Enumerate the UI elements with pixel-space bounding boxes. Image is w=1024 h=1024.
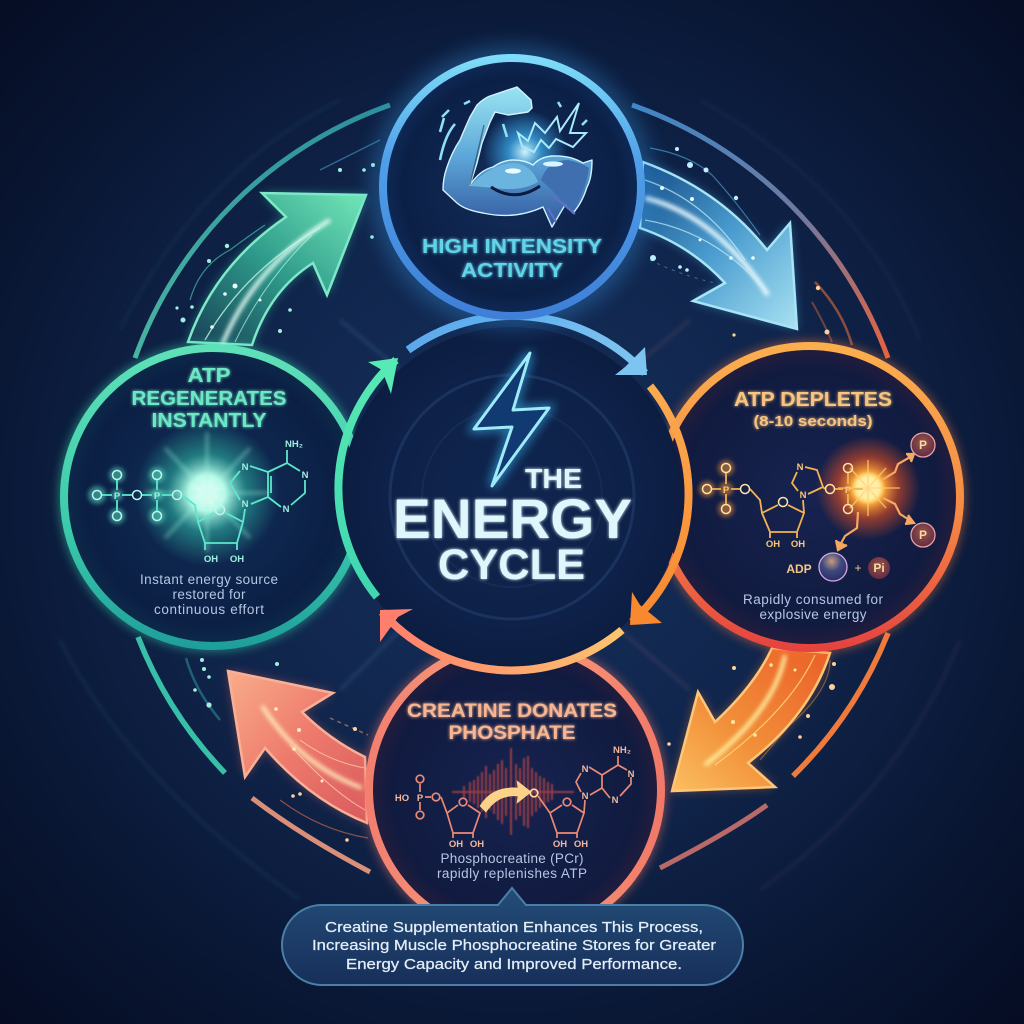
ADP plus Pi equation xyxy=(786,553,890,581)
molecule: creatine phosphate: OH xyxy=(470,839,484,850)
molecule: adenosine xyxy=(530,745,635,850)
heading: creatine donates phosphate: PHOSPHATE xyxy=(448,722,576,744)
heading: ATP regenerates instantly: ATP xyxy=(188,365,230,387)
explosion burst xyxy=(816,436,920,540)
molecule: creatine phosphate: OH xyxy=(449,839,463,850)
heading: high intensity activity: HIGH INTENSITY xyxy=(422,236,603,258)
arrow: coral to left circle xyxy=(228,671,367,823)
sparkles xyxy=(175,140,852,842)
heading: high intensity activity xyxy=(422,236,603,282)
molecule: creatine phosphate: HO xyxy=(395,793,409,804)
molecule: depleting ATP: P xyxy=(845,485,852,496)
caption: instant energy source: restored for xyxy=(172,587,246,602)
heading: ATP depletes: ATP DEPLETES xyxy=(734,389,892,411)
waveform xyxy=(452,748,574,835)
molecule: ATP: P xyxy=(154,491,161,502)
caption: rapidly consumed: Rapidly consumed for xyxy=(743,592,884,607)
icon: lightning bolt xyxy=(474,353,549,486)
title: the energy cycle xyxy=(393,463,632,589)
molecule: adenosine: N xyxy=(628,769,635,780)
molecule: ATP: OH xyxy=(204,554,218,565)
heading: ATP depletes xyxy=(734,389,892,430)
energy burst xyxy=(135,421,279,565)
molecule: adenosine: NH₂ xyxy=(613,745,631,756)
caption: phosphocreatine xyxy=(437,851,587,881)
molecule: depleting ATP: OH xyxy=(766,539,780,550)
caption: phosphocreatine: Phosphocreatine (PCr) xyxy=(440,851,584,866)
cycle arrow: coral xyxy=(380,609,622,670)
molecule: depleting ATP: N xyxy=(797,462,804,473)
outer arc: blue to orange xyxy=(632,105,888,358)
molecule: adenosine: N xyxy=(612,795,619,806)
ADP plus Pi equation: ADP xyxy=(786,562,812,576)
outer arc: teal xyxy=(138,637,225,773)
callout: creatine supplementation: Energy Capacity and Improved Performance. xyxy=(346,956,682,973)
phosphate release arrows xyxy=(836,454,914,550)
panel: high intensity activity xyxy=(383,58,641,316)
ADP plus Pi equation: + xyxy=(854,561,862,575)
molecule: adenosine: N xyxy=(582,764,589,775)
outer arc: green xyxy=(135,105,390,358)
phosphate balls: P xyxy=(919,528,927,542)
molecule: ATP: N xyxy=(242,462,249,473)
phosphate balls xyxy=(911,433,935,547)
caption: phosphocreatine: rapidly replenishes ATP xyxy=(437,866,587,881)
molecule: ATP: OH xyxy=(230,554,244,565)
callout: creatine supplementation xyxy=(282,888,743,985)
title: the energy cycle: THE xyxy=(525,463,582,494)
molecule: ATP: N xyxy=(302,470,309,481)
heading: ATP regenerates instantly xyxy=(132,365,286,432)
arrow: blue to right circle xyxy=(640,162,797,329)
heading: ATP depletes: (8-10 seconds) xyxy=(754,413,872,430)
icon: burst xyxy=(518,103,586,152)
molecule: ATP: N xyxy=(242,499,249,510)
molecule: depleting ATP: P xyxy=(723,485,730,496)
molecule: ATP: NH₂ xyxy=(285,439,303,450)
molecule: ATP: P xyxy=(114,491,121,502)
outer arc: orange xyxy=(793,633,888,776)
molecule: ATP: N xyxy=(283,504,290,515)
panel: ATP depletes xyxy=(658,346,960,648)
molecule: adenosine: N xyxy=(582,791,589,802)
title: the energy cycle: CYCLE xyxy=(438,541,585,589)
heading: creatine donates phosphate xyxy=(407,700,617,744)
heading: creatine donates phosphate: CREATINE DONATES xyxy=(407,700,617,722)
heading: ATP regenerates instantly: REGENERATES xyxy=(132,388,286,410)
caption: rapidly consumed xyxy=(743,592,884,622)
title: the energy cycle: ENERGY xyxy=(393,487,632,550)
caption: rapidly consumed: explosive energy xyxy=(760,607,867,622)
panel: ATP regenerates instantly xyxy=(64,348,362,646)
molecule: ATP xyxy=(88,439,309,565)
center disk xyxy=(342,327,682,667)
molecule: depleting ATP xyxy=(699,460,872,550)
molecule: adenosine: OH xyxy=(574,839,588,850)
heading: ATP regenerates instantly: INSTANTLY xyxy=(152,410,267,432)
cycle arrow: blue xyxy=(408,316,647,375)
icon: flexed muscle xyxy=(440,87,592,227)
callout: creatine supplementation: Creatine Supplementation Enhances This Process, xyxy=(325,919,703,936)
panel: creatine donates phosphate xyxy=(369,644,661,936)
outer arc: salmon xyxy=(252,798,370,872)
caption: instant energy source xyxy=(140,572,278,617)
outer ring arcs xyxy=(135,105,888,872)
molecule: creatine phosphate xyxy=(395,775,484,850)
molecule: adenosine: OH xyxy=(553,839,567,850)
molecule: creatine phosphate: P xyxy=(417,793,424,804)
molecule: depleting ATP: N xyxy=(800,490,807,501)
arrow: green to top xyxy=(188,193,366,345)
caption: instant energy source: continuous effort xyxy=(154,602,264,617)
faint diagonal light streaks xyxy=(60,100,960,900)
ADP plus Pi equation: Pi xyxy=(873,561,885,575)
caption: instant energy source: Instant energy source xyxy=(140,572,278,587)
arrow: orange to bottom circle xyxy=(672,648,830,791)
transfer arrow xyxy=(480,781,531,812)
cycle arrow: green xyxy=(338,358,398,597)
cycle arrow: orange xyxy=(630,386,689,625)
callout: creatine supplementation: Increasing Muscle Phosphocreatine Stores for Greater xyxy=(312,937,716,954)
heading: high intensity activity: ACTIVITY xyxy=(461,260,564,282)
molecule: depleting ATP: OH xyxy=(791,539,805,550)
phosphate balls: P xyxy=(919,438,927,452)
outer arc: pink xyxy=(660,805,767,868)
